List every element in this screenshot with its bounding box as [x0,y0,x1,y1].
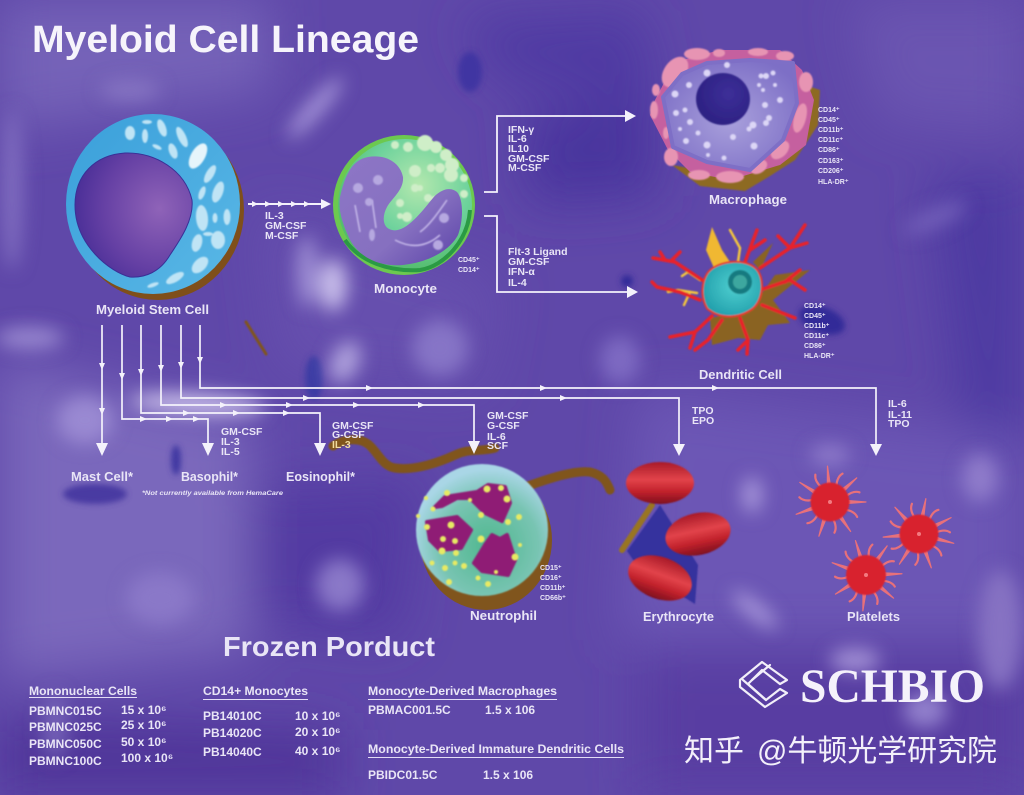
cytokines: basophil [221,426,263,458]
cytokines: platelets [888,398,912,430]
markers: neutrophil: CD16⁺ [540,575,562,582]
cytokines: platelets: TPO [888,418,910,430]
markers: dendritic cell: CD86⁺ [804,343,826,350]
arrow: stem cell to monocyte [248,199,331,209]
cytokines: platelets: IL-6 [888,398,907,410]
cytokines: eosinophil: IL-3 [332,439,351,451]
table: monocyte-derived immature dendritic cells: Monocyte-Derived Immature Dendritic Cells [368,742,624,756]
cytokines: neutrophil: IL-6 [487,431,506,443]
cytokines: dendritic cell: Flt-3 Ligand [508,246,568,258]
red dendrites [652,225,807,354]
markers: dendritic cell: CD11c⁺ [804,333,829,340]
markers: macrophage: CD11b⁺ [818,127,844,134]
label: monocyte: Monocyte [374,281,437,296]
granules [416,485,522,587]
cytokines: dendritic cell: IL-4 [508,277,527,289]
table: cd14+ monocytes: 20 x 10⁶ [295,725,341,739]
table: cd14+ monocytes: 10 x 10⁶ [295,709,341,723]
markers: dendritic cell: CD11b⁺ [804,323,830,330]
cytokines: macrophage: M-CSF [508,162,542,174]
arrows: stem cell lineage branches [96,325,882,456]
label: eosinophil: Eosinophil* [286,469,356,484]
arrow: monocyte to macrophage [484,110,636,192]
label: erythrocyte: Erythrocyte [643,609,714,624]
macrophage vesicles [672,62,783,160]
table: mononuclear cells: PBMNC025C [29,720,102,734]
cytokines: basophil: GM-CSF [221,426,263,438]
logo: schbio [740,660,985,713]
icon: erythrocytes [622,462,735,609]
markers: monocyte: CD14⁺ [458,267,480,274]
granules [125,118,230,289]
label: platelets: Platelets [847,609,900,624]
table: mononuclear cells: PBMNC015C [29,704,102,718]
table: mononuclear cells [29,684,173,768]
table: mononuclear cells: PBMNC100C [29,754,102,768]
nucleus lobes [427,485,515,575]
cytokines: dendritic cell: IFN-α [508,266,535,278]
label: macrophage: Macrophage [709,192,787,207]
cytoplasm vesicles [391,135,468,222]
markers: monocyte: CD45⁺ [458,257,480,264]
table: mononuclear cells: 50 x 10⁶ [121,735,167,749]
markers: dendritic cell: CD45⁺ [804,313,826,320]
brown ribbons [246,322,652,550]
footnote: *Not currently available from HemaCare [142,490,283,497]
markers: monocyte [458,257,480,274]
markers: macrophage [818,107,849,186]
title: Myeloid Cell Lineage [32,19,419,61]
table: monocyte-derived immature dendritic cells: PBIDC01.5C [368,768,438,782]
table: mononuclear cells: 25 x 10⁶ [121,718,167,732]
table: monocyte-derived macrophages: PBMAC001.5C [368,703,451,717]
cytokines: neutrophil [487,410,529,452]
icon: platelets [796,466,963,625]
label: basophil: Basophil* [181,469,239,484]
markers: neutrophil: CD15⁺ [540,565,562,572]
brown base [710,270,810,345]
markers: dendritic cell [804,303,835,360]
cytokines: eosinophil: G-CSF [332,429,365,441]
heading: frozen product: Frozen Porduct [223,631,435,662]
markers: macrophage: CD14⁺ [818,107,840,114]
cytokines: erythrocyte: EPO [692,415,714,427]
table: cd14+ monocytes: 40 x 10⁶ [295,744,341,758]
watermark: 知乎 [684,735,744,768]
cytokines: platelets: IL-11 [888,409,912,421]
markers: macrophage: HLA-DR⁺ [818,179,849,186]
cytokines: eosinophil: GM-CSF [332,420,374,432]
icon: macrophage [650,48,820,191]
cytokines: macrophage: IL-6 [508,133,527,145]
label: dendritic cell: Dendritic Cell [699,367,782,382]
cytokines: macrophage: GM-CSF [508,153,550,165]
markers: neutrophil: CD11b⁺ [540,585,566,592]
markers: macrophage: CD45⁺ [818,117,840,124]
markers: dendritic cell: CD14⁺ [804,303,826,310]
cytokines: dendritic cell [508,246,568,289]
label: mast cell: Mast Cell* [71,469,134,484]
pink lobes [650,48,813,183]
table: mononuclear cells: Mononuclear Cells [29,684,137,698]
markers: neutrophil [540,565,566,602]
cytokines: dendritic cell: GM-CSF [508,256,550,268]
cytokines: neutrophil: G-CSF [487,420,520,432]
label: myeloid stem cell: Myeloid Stem Cell [96,302,209,317]
cytokines: basophil: IL-5 [221,446,240,458]
markers: neutrophil: CD66b⁺ [540,595,566,602]
cytokines: macrophage [508,124,550,174]
table: monocyte-derived immature dendritic cells [368,742,624,782]
table: monocyte-derived macrophages: 1.5 x 106 [485,703,535,717]
markers: macrophage: CD11c⁺ [818,137,843,144]
icon: dendritic cell [652,225,810,354]
label: neutrophil: Neutrophil [470,608,537,623]
cytokines: basophil: IL-3 [221,436,240,448]
table: monocyte-derived macrophages: Monocyte-Derived Macrophages [368,684,557,698]
markers: dendritic cell: HLA-DR⁺ [804,353,835,360]
navy patch behind erythrocytes [627,505,698,604]
yellow dendrites [706,227,732,268]
icon: schbio mark [740,662,787,707]
table: cd14+ monocytes: PB14040C [203,745,262,759]
table: cd14+ monocytes: PB14020C [203,726,262,740]
cytokines: erythrocyte: TPO [692,405,714,417]
cytokines: stem to monocyte: M-CSF [265,230,299,242]
cytokines: neutrophil: GM-CSF [487,410,529,422]
table: mononuclear cells: 15 x 10⁶ [121,703,167,717]
table: cd14+ monocytes [203,684,341,759]
cytokines: stem to monocyte: IL-3 [265,210,284,222]
cytokines: stem to monocyte [265,210,307,242]
icon: monocyte [333,135,475,275]
table: cd14+ monocytes: CD14+ Monocytes [203,684,308,698]
table: monocyte-derived macrophages [368,684,557,717]
cytokines: stem to monocyte: GM-CSF [265,220,307,232]
cytokines: erythrocyte [692,405,714,427]
cytokines: macrophage: IL10 [508,143,529,155]
table: mononuclear cells: PBMNC050C [29,737,102,751]
arrow: monocyte to dendritic cell [484,216,638,298]
markers: macrophage: CD163⁺ [818,158,844,165]
cytokines: macrophage: IFN-γ [508,124,534,136]
markers: macrophage: CD206⁺ [818,168,844,175]
table: monocyte-derived immature dendritic cells: 1.5 x 106 [483,768,533,782]
cytokines: eosinophil [332,420,374,451]
markers: macrophage: CD86⁺ [818,147,840,154]
table: cd14+ monocytes: PB14010C [203,709,262,723]
cytokines: neutrophil: SCF [487,440,509,452]
table: mononuclear cells: 100 x 10⁶ [121,751,173,765]
icon: myeloid stem cell [66,114,244,300]
icon: neutrophil [416,464,552,610]
brand name: SCHBIO [800,660,985,713]
watermark: @牛顿光学研究院 [757,735,997,768]
